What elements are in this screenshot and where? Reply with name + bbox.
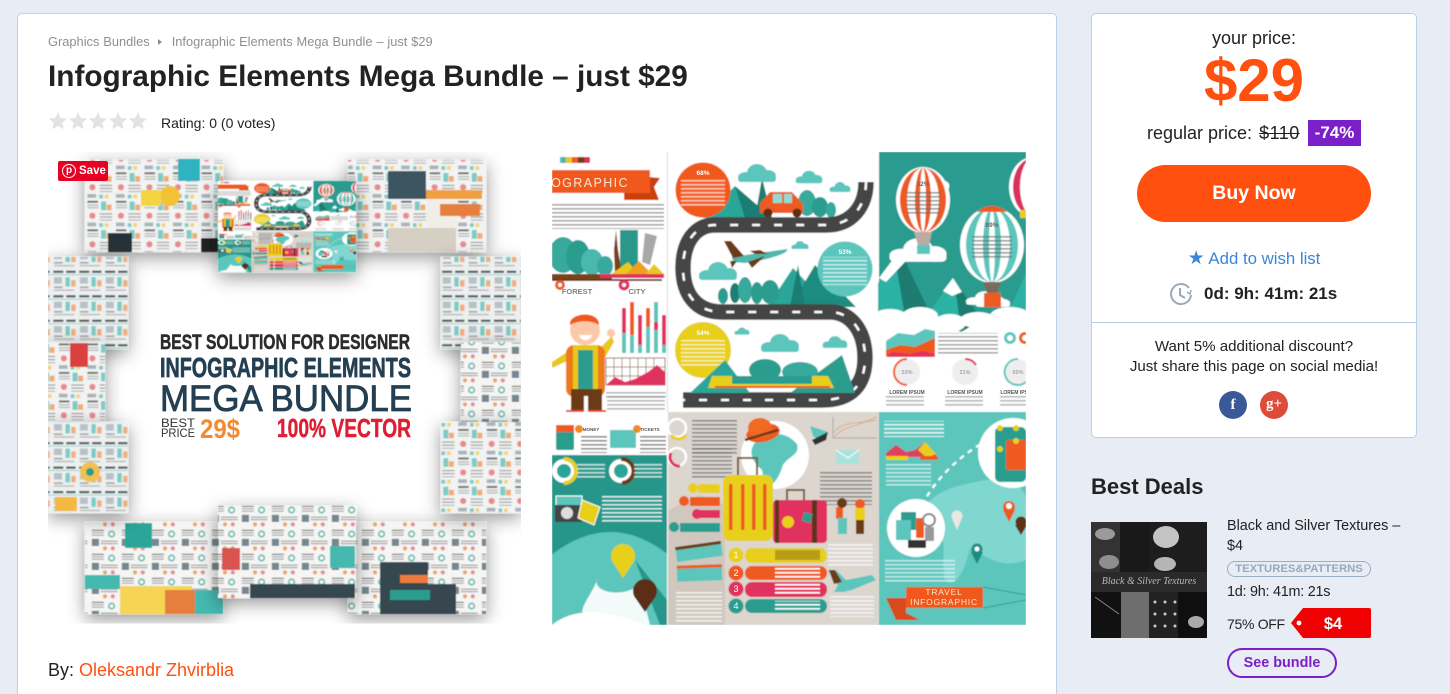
price: $29 bbox=[1204, 47, 1304, 114]
rating text: Rating: 0 (0 votes) bbox=[161, 115, 275, 131]
buy now button bbox=[1137, 165, 1371, 222]
title: Infographic Elements Mega Bundle – just $29 bbox=[48, 60, 688, 93]
pin label city: CITY bbox=[628, 287, 646, 296]
regular price: regular price: $110 bbox=[1147, 123, 1300, 143]
image 1: mega bundle cover bbox=[48, 152, 521, 625]
heading: best deals: Best Deals bbox=[1091, 474, 1204, 499]
lorem head 2: LOREM IPSUM bbox=[947, 390, 983, 396]
buy now button: Buy Now bbox=[1212, 182, 1296, 204]
ribbon title: TRAVEL bbox=[925, 587, 963, 597]
product images bbox=[48, 152, 1026, 625]
pinterest save button: p bbox=[66, 165, 72, 176]
text: 29 dollars: 29$ bbox=[200, 414, 240, 444]
deal thumbnail: Black & Silver Textures bbox=[1102, 576, 1196, 587]
breadcrumb: Graphics Bundles Infographic Elements Mega Bundle – just $29 bbox=[48, 34, 433, 49]
ribbon numbers: 1 bbox=[733, 550, 739, 560]
see bundle button: See bundle bbox=[1244, 655, 1320, 671]
icon: google plus: g+ bbox=[1266, 396, 1282, 412]
clock icon bbox=[1170, 283, 1192, 306]
author line: By: Oleksandr Zhvirblia bbox=[48, 660, 234, 680]
discount badge bbox=[1308, 120, 1361, 146]
deal thumbnail bbox=[1091, 522, 1207, 638]
ribbon numbers: 2 bbox=[733, 568, 739, 578]
road percent 2: 53% bbox=[838, 249, 852, 256]
panel: price card bbox=[1091, 13, 1417, 438]
banner text: OGRAPHIC bbox=[551, 176, 629, 190]
cover headline bbox=[160, 331, 412, 444]
ribbon numbers bbox=[733, 550, 739, 611]
share prompt: Just share this page on social media! bbox=[1130, 358, 1378, 375]
balloon percent 1: 32% bbox=[916, 181, 930, 188]
pin labels: FOREST bbox=[562, 287, 593, 296]
price tag: $4 bbox=[1324, 615, 1343, 633]
ribbon numbers: 3 bbox=[733, 584, 739, 594]
money: MONEY bbox=[583, 427, 599, 432]
balloon percent 2: 89% bbox=[985, 222, 999, 229]
share prompt bbox=[1130, 338, 1378, 375]
image 2: travel infographic bbox=[549, 152, 1057, 625]
tickets: TICKETS bbox=[640, 427, 660, 432]
pinterest save button bbox=[58, 161, 108, 181]
category tag bbox=[1227, 561, 1371, 577]
thumbnail collage bbox=[48, 159, 521, 614]
lorem heads: LOREM IPSUM bbox=[889, 390, 925, 396]
category tag: TEXTURES&PATTERNS bbox=[1235, 563, 1363, 575]
discount text: 75% OFF bbox=[1227, 616, 1285, 632]
rating stars bbox=[49, 112, 147, 129]
divider bbox=[1092, 322, 1416, 323]
icon: facebook bbox=[1219, 391, 1247, 419]
ring value 3: 59% bbox=[1012, 370, 1024, 376]
icon: google plus bbox=[1260, 391, 1288, 419]
ring value 2: 21% bbox=[959, 370, 971, 376]
see bundle button bbox=[1227, 648, 1337, 678]
ribbon title: INFOGRAPHIC bbox=[910, 597, 978, 607]
deal title: Black and Silver Textures – bbox=[1227, 518, 1400, 534]
price tag bbox=[1291, 608, 1371, 638]
discount badge: -74% bbox=[1315, 123, 1354, 142]
countdown: 0d: 9h: 41m: 21s bbox=[1204, 284, 1337, 303]
artwork labels bbox=[551, 170, 1036, 611]
text: best price: BEST bbox=[161, 416, 196, 430]
panel: main product card bbox=[17, 13, 1057, 694]
ring values: 53% bbox=[901, 370, 913, 376]
text: mega bundle: MEGA BUNDLE bbox=[160, 378, 412, 419]
ribbon title bbox=[910, 589, 977, 605]
deal title bbox=[1227, 518, 1400, 554]
share prompt: Want 5% additional discount? bbox=[1155, 338, 1353, 355]
road percent 3: 54% bbox=[696, 330, 710, 337]
text: 100 percent vector: 100% VECTOR bbox=[277, 413, 411, 443]
icon: facebook: f bbox=[1230, 397, 1236, 413]
text: best solution: BEST SOLUTION FOR DESIGNER bbox=[160, 331, 410, 354]
road percent 1: 68% bbox=[696, 170, 710, 177]
ribbon numbers: 4 bbox=[733, 601, 739, 611]
text: infographic elements: INFOGRAPHIC ELEMENTS bbox=[160, 352, 411, 383]
text: price label: PRICE bbox=[161, 426, 195, 440]
your price label: your price: bbox=[1212, 28, 1296, 48]
pinterest save button: Save bbox=[79, 165, 106, 177]
deal title: $4 bbox=[1227, 538, 1243, 554]
wish list link: ★ Add to wish list bbox=[1188, 248, 1320, 269]
deal timer: 1d: 9h: 41m: 21s bbox=[1227, 584, 1330, 600]
